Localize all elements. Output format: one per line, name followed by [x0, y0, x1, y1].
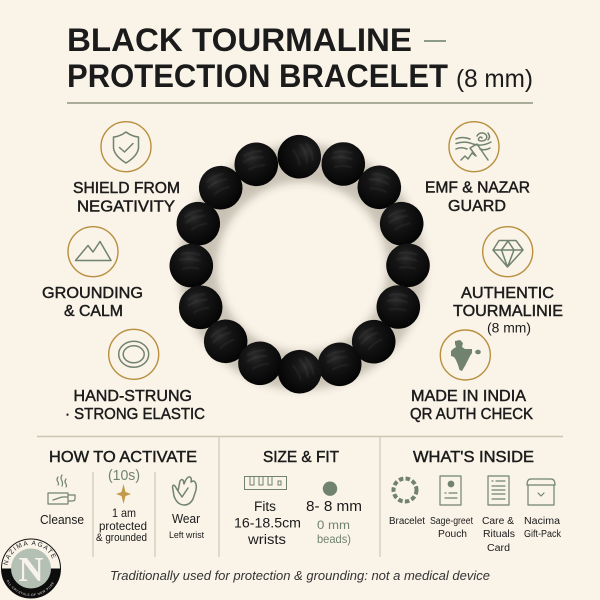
- logo badge: NAZIMA AGATE: [3, 540, 56, 565]
- benefit: shield from negativity: [73, 122, 180, 216]
- panel: what's inside: Rituals: [483, 529, 515, 540]
- panel: what's inside: Nacima: [524, 516, 560, 527]
- benefit: emf and nazar guard: GUARD: [448, 198, 506, 215]
- bracelet beads: [167, 130, 433, 400]
- icon: steam and cup: [48, 475, 75, 504]
- panel: size and fit: 0 mm: [317, 518, 350, 532]
- icon: ritual card: [488, 476, 509, 505]
- title: BLACK TOURMALINE: [67, 22, 412, 58]
- footer disclaimer: Traditionally used for protection & grounding: not a medical device: [110, 568, 490, 583]
- panel: size and fit: 8- 8 mm: [306, 498, 362, 515]
- bracelet: [167, 130, 433, 400]
- benefit: made in india: MADE IN INDIA: [411, 388, 526, 405]
- benefit: grounding and calm: [42, 227, 143, 320]
- panel: how to activate: 1 am: [112, 506, 136, 520]
- icon: india map: [440, 330, 490, 380]
- benefit: authentic tourmaline: AUTHENTIC: [461, 285, 554, 302]
- panel: how to activate: protected: [99, 519, 147, 533]
- logo badge: ALL CRYSTALS OF NEW PURE: [6, 580, 54, 596]
- panel: what's inside: Sage-greet: [430, 516, 473, 527]
- panel: how to activate: HOW TO ACTIVATE: [49, 449, 197, 466]
- title: (8 mm): [456, 65, 533, 93]
- panel: what's inside: Bracelet: [389, 516, 425, 527]
- icon: hand: [172, 477, 196, 505]
- icon: gold sparkle: [116, 484, 131, 504]
- panel: how to activate: & grounded: [96, 532, 147, 544]
- panel: how to activate: Cleanse: [40, 513, 84, 527]
- panel: size and fit: Fits: [254, 499, 276, 514]
- icon: mountains: [68, 227, 118, 277]
- icon: shield: [101, 122, 151, 172]
- panel: what's inside: WHAT'S INSIDE: [413, 449, 534, 466]
- benefit: made in india: QR AUTH CHECK: [410, 406, 533, 423]
- benefit: grounding and calm: & CALM: [64, 303, 123, 320]
- title: PROTECTION BRACELET: [67, 58, 448, 94]
- benefit: shield from negativity: NEGATIVITY: [77, 198, 175, 216]
- benefit: hand-strung: · STRONG ELASTIC: [65, 406, 205, 423]
- panel: how to activate: (10s): [108, 467, 140, 484]
- panel: size and fit: wrists: [247, 532, 286, 547]
- panel: how to activate: [40, 449, 204, 544]
- benefit: grounding and calm: GROUNDING: [42, 285, 143, 302]
- benefit: authentic tourmaline: [453, 227, 563, 336]
- icon: elastic rings: [109, 329, 159, 379]
- icon: waves and mountain: [449, 122, 499, 172]
- benefit: hand-strung: [65, 329, 205, 423]
- benefit: made in india: [410, 330, 533, 423]
- benefit: authentic tourmaline: (8 mm): [487, 320, 531, 336]
- icon: gift box: [527, 479, 555, 505]
- icon: tape ruler: [244, 476, 286, 490]
- benefit: emf and nazar guard: [425, 122, 530, 215]
- bracelet shadow: [198, 163, 406, 371]
- benefit: emf and nazar guard: EMF & NAZAR: [425, 180, 530, 197]
- title: [67, 22, 533, 94]
- panel: what's inside: [389, 449, 562, 554]
- panel: what's inside: Gift-Pack: [524, 529, 562, 540]
- panel: size and fit: 16-18.5cm: [234, 516, 301, 531]
- panel: how to activate: Wear: [172, 512, 200, 526]
- panel: size and fit: beads): [317, 532, 351, 546]
- benefit: authentic tourmaline: TOURMALINIE: [453, 303, 563, 320]
- panel: size and fit: [234, 449, 362, 547]
- icon: bead dot: [323, 482, 337, 496]
- logo badge: N: [18, 550, 44, 589]
- panel: what's inside: Pouch: [438, 529, 467, 540]
- benefit: hand-strung: HAND-STRUNG: [74, 388, 192, 405]
- panel: what's inside: Care &: [482, 516, 514, 527]
- panel: how to activate: Left wrist: [169, 530, 204, 541]
- logo badge: [1, 538, 61, 598]
- icon: pouch card: [440, 476, 461, 505]
- panel: size and fit: SIZE & FIT: [263, 449, 339, 466]
- icon: bracelet wreath: [394, 478, 416, 502]
- panel: what's inside: Card: [487, 543, 510, 554]
- benefit: shield from negativity: SHIELD FROM: [73, 180, 180, 197]
- icon: diamond: [483, 227, 533, 277]
